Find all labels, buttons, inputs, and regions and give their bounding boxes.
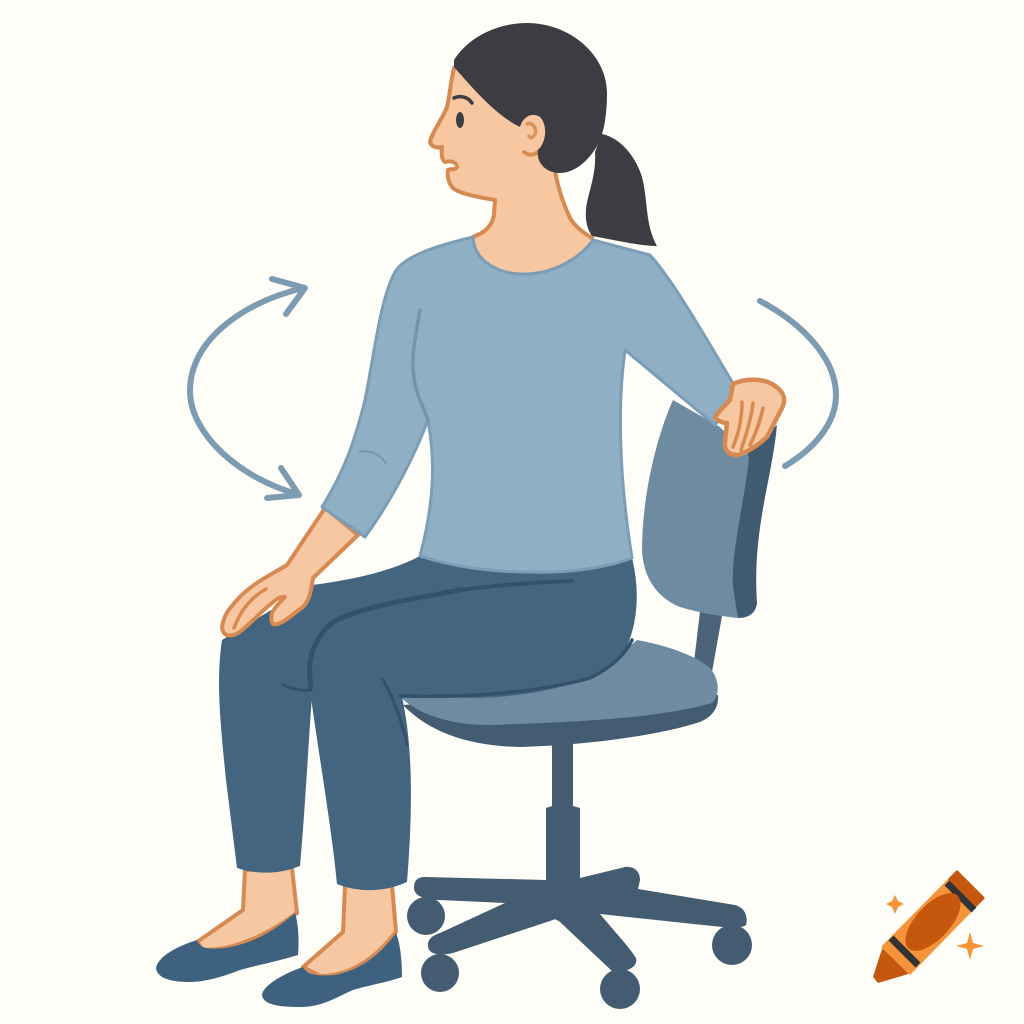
woman	[156, 23, 784, 1007]
ponytail	[586, 134, 657, 246]
ear	[520, 115, 545, 149]
chair back post	[694, 612, 722, 672]
forearm and hand: left	[222, 508, 358, 635]
thigh and hip	[222, 556, 637, 698]
right shoe	[262, 933, 402, 1007]
sweater	[322, 237, 738, 572]
crayon bands	[947, 883, 974, 910]
chair	[400, 400, 777, 1009]
eye	[456, 112, 464, 128]
chair back cushion	[642, 400, 749, 618]
crayon oval	[896, 884, 970, 960]
finger lines	[733, 402, 763, 450]
trouser fold lines	[283, 581, 632, 745]
chair back side	[725, 425, 777, 618]
crayon logo	[873, 872, 984, 983]
hand on chair back	[715, 380, 784, 455]
face outline	[430, 68, 592, 238]
left foot	[197, 868, 297, 950]
crayon tip	[873, 947, 910, 983]
crayon body	[883, 872, 983, 973]
right foot	[303, 885, 396, 976]
hair	[454, 23, 607, 173]
arrow: rotation left double-headed	[190, 279, 305, 498]
far leg	[219, 640, 330, 873]
chair base	[407, 740, 752, 1009]
arrow: rotation right arc	[760, 301, 836, 466]
neck and face	[430, 68, 592, 285]
sleeve seams	[360, 310, 428, 463]
chair seat	[400, 640, 718, 725]
eyebrow	[454, 97, 472, 103]
trousers	[219, 556, 637, 890]
chair seat underside	[403, 690, 718, 747]
near leg	[310, 640, 411, 890]
crayon cap	[950, 872, 983, 905]
sparkle small	[886, 895, 904, 914]
finger line	[234, 589, 266, 628]
sparkle large	[956, 932, 984, 960]
left shoe	[156, 913, 299, 982]
